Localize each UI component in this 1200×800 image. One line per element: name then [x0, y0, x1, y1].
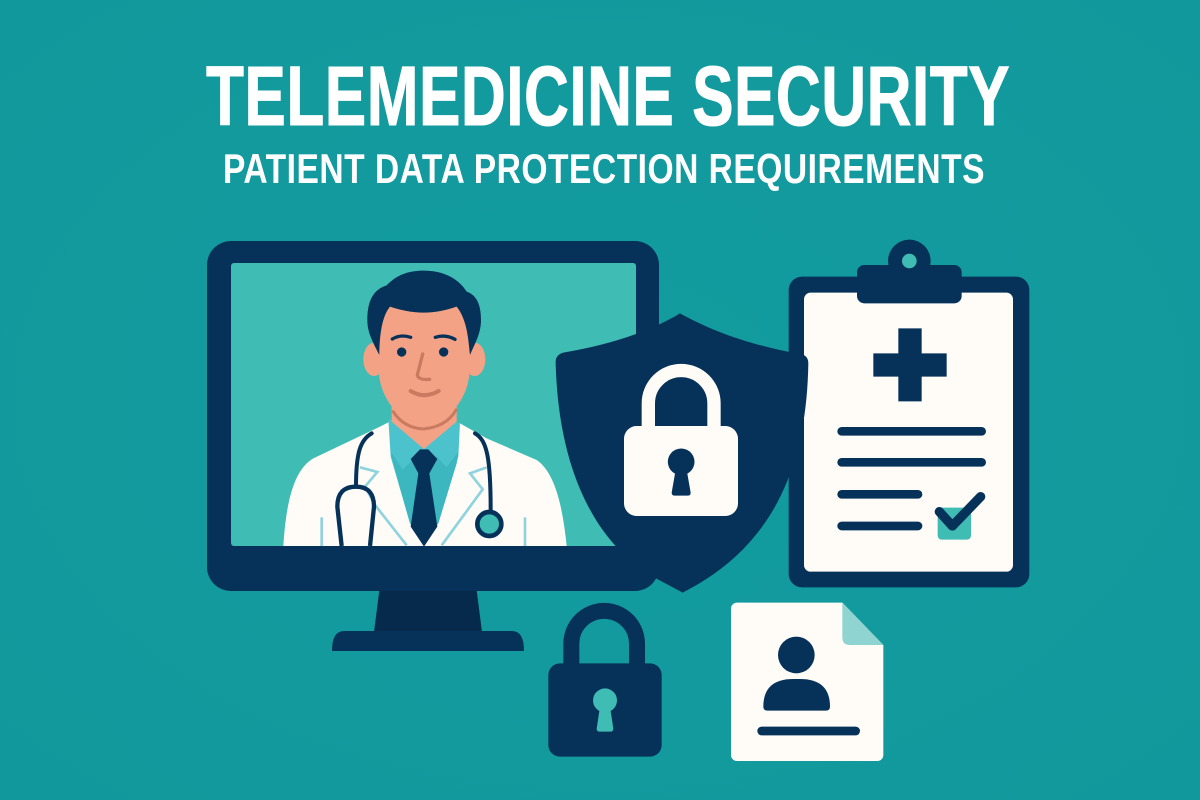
text lines [842, 431, 982, 526]
title: TELEMEDICINE SECURITY [206, 49, 1010, 143]
icon: desktop monitor [207, 241, 659, 651]
padlock shackle [648, 370, 714, 428]
face [379, 300, 469, 425]
shirt [388, 419, 460, 546]
smile [411, 391, 439, 395]
subtitle: PATIENT DATA PROTECTION REQUIREMENTS [223, 147, 985, 193]
person avatar [763, 637, 830, 711]
icon: medical clipboard [789, 240, 1029, 587]
white coat [283, 422, 567, 546]
eyes [397, 347, 448, 357]
icon: patient record document [731, 603, 883, 761]
doctor illustration [283, 271, 567, 547]
medical cross [873, 328, 947, 401]
neck [392, 407, 457, 449]
lapels [322, 467, 525, 546]
padlock body [624, 426, 738, 516]
hair [367, 271, 481, 355]
tie [411, 449, 437, 547]
nose [417, 354, 430, 379]
checkbox [938, 497, 981, 540]
keyhole [593, 688, 617, 732]
icon: small padlock [548, 611, 662, 757]
folded corner [842, 603, 883, 645]
ears [363, 343, 385, 376]
name line [762, 718, 856, 744]
icon: security shield with padlock [556, 313, 808, 593]
eyebrows [392, 336, 455, 339]
stethoscope [337, 433, 501, 546]
